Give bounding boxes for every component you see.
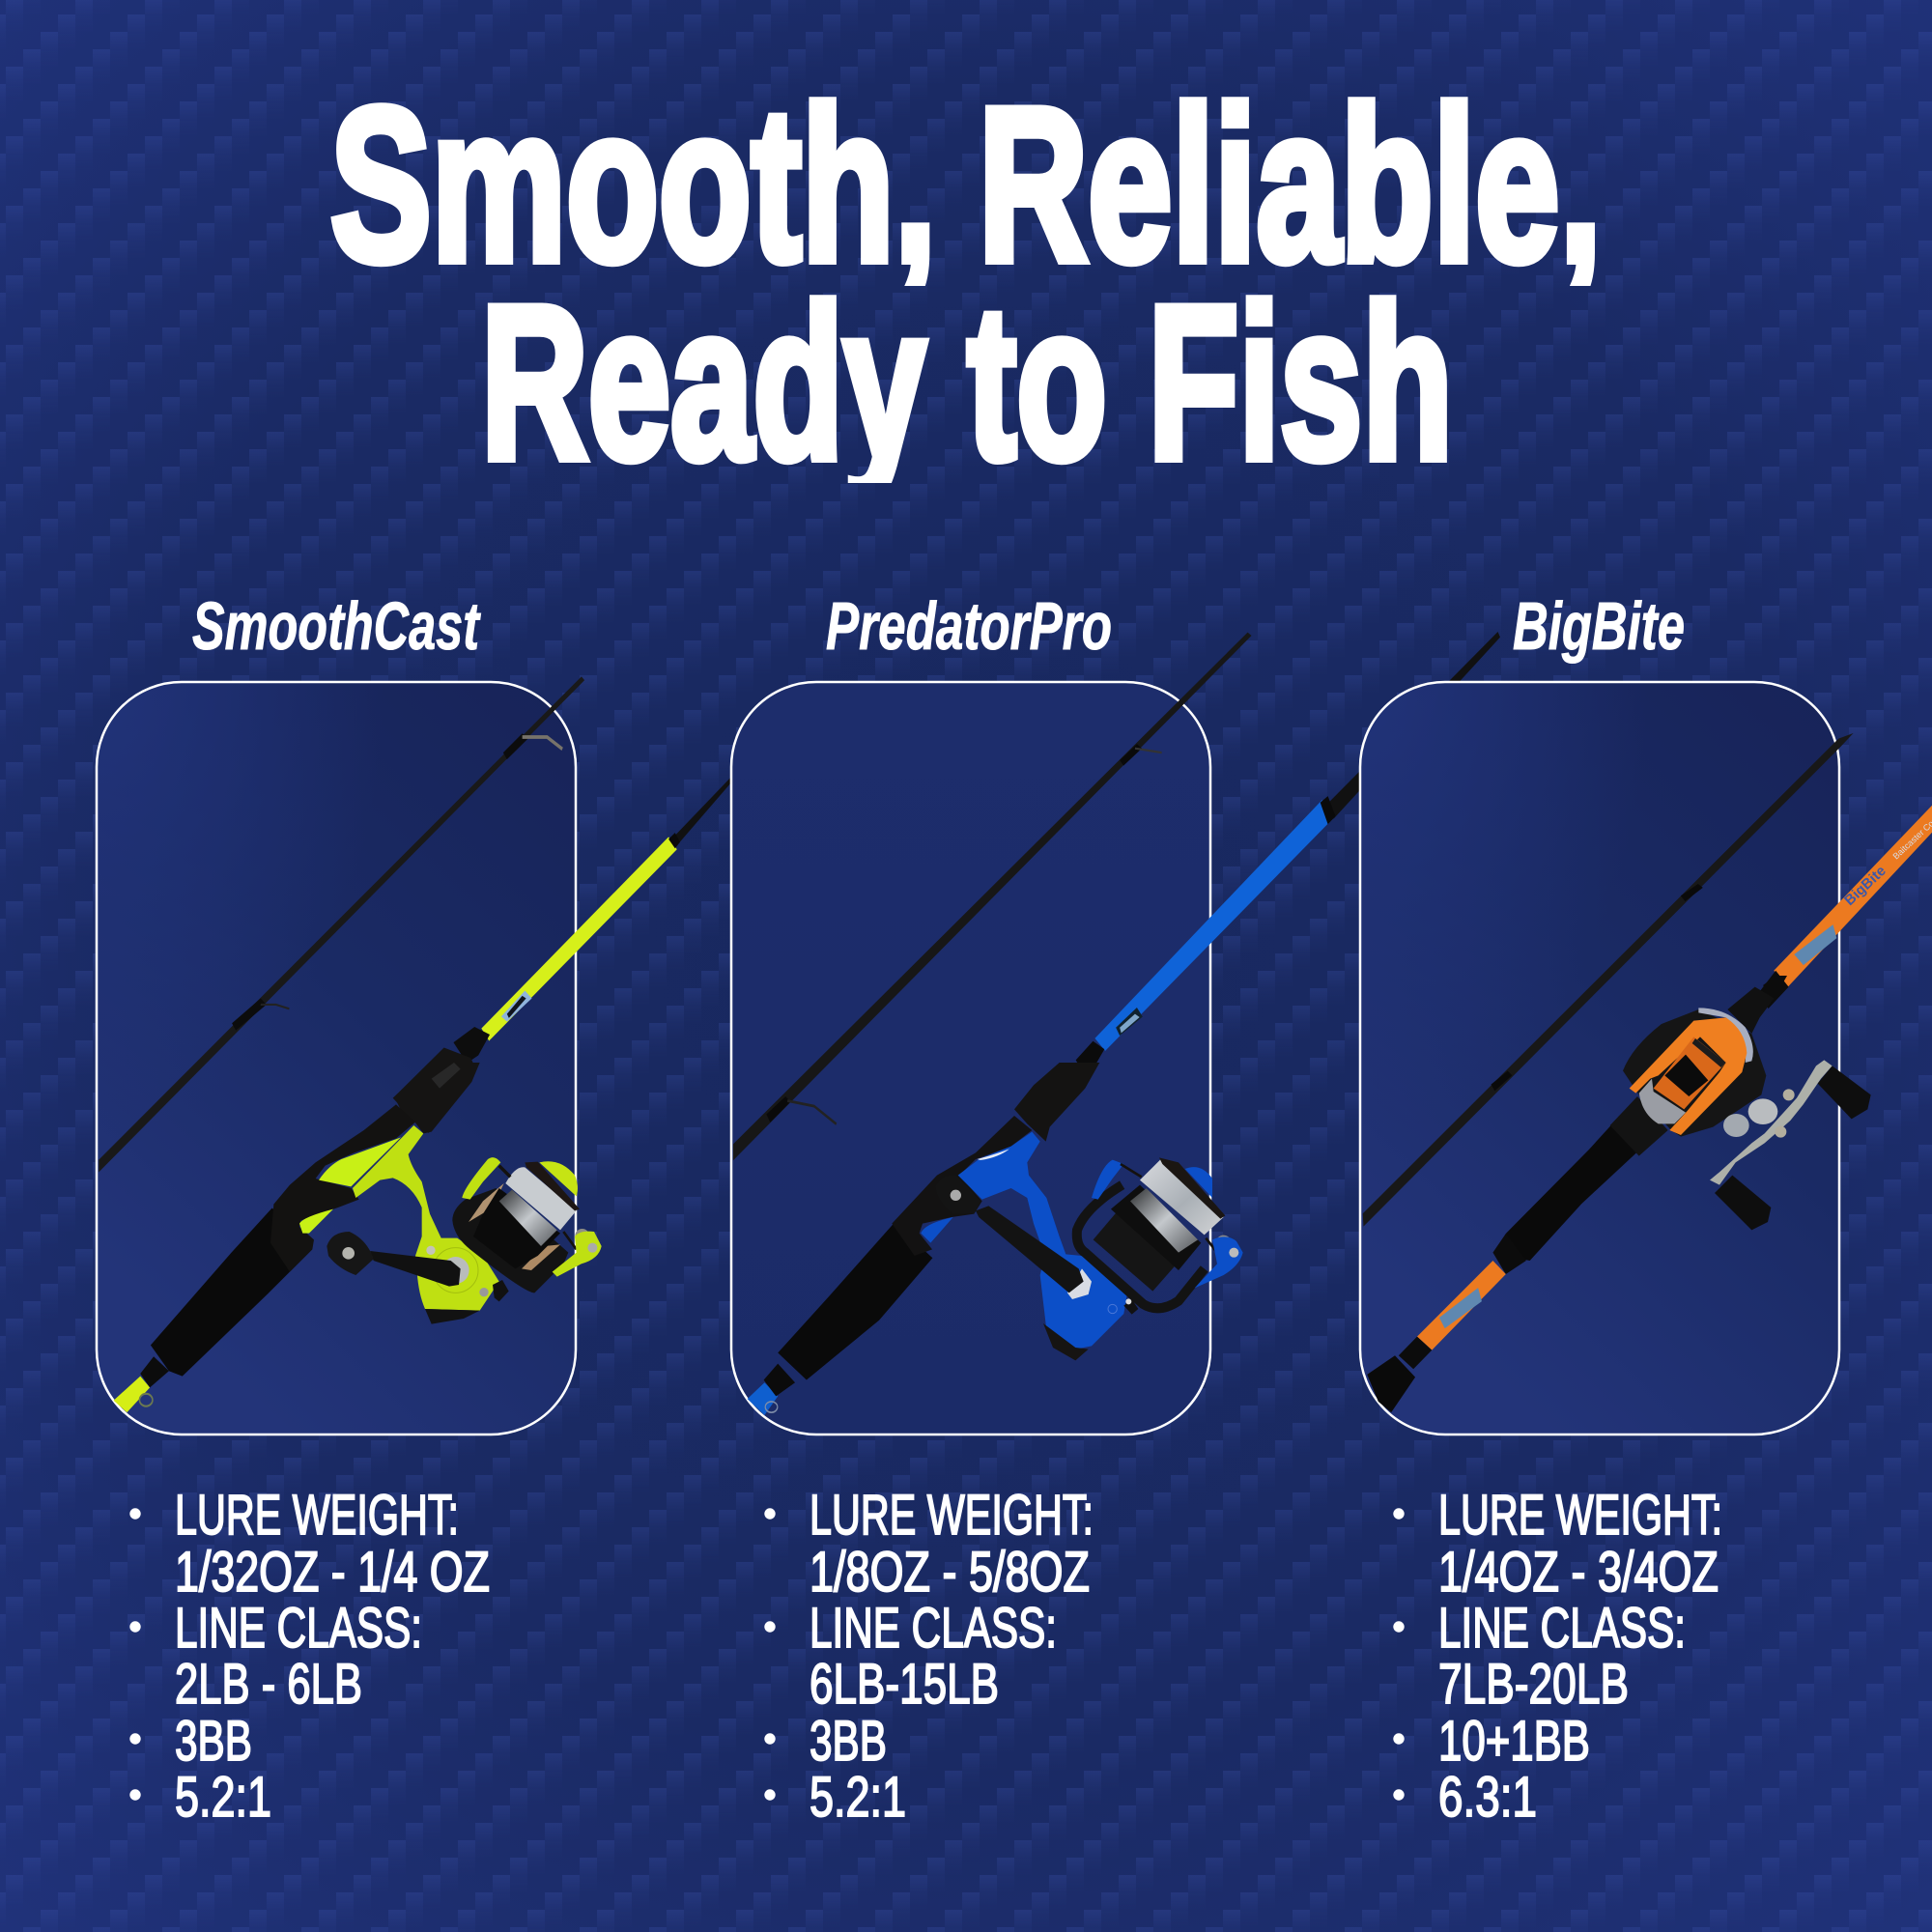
product name: PredatorPro: PredatorPro: [826, 588, 1112, 664]
spec list: SmoothCast: 3BB: [175, 1710, 252, 1773]
title: [330, 97, 1595, 483]
spec list: PredatorPro: LINE CLASS:: [810, 1597, 1057, 1660]
spec list: BigBite: 10+1BB: [1438, 1710, 1590, 1773]
product name: BigBite: BigBite: [1513, 588, 1685, 664]
spec list: SmoothCast: 2LB - 6LB: [175, 1653, 362, 1716]
title: Ready to Fish: [481, 260, 1453, 504]
spec list: BigBite: 7LB-20LB: [1438, 1653, 1629, 1716]
rod and baitcasting reel: orange: [1363, 733, 1932, 1412]
spec list: BigBite: LURE WEIGHT:: [1438, 1484, 1722, 1547]
spec list: PredatorPro: 5.2:1: [810, 1766, 906, 1829]
column: PredatorPro: [731, 588, 1500, 1435]
column: SmoothCast: [97, 588, 731, 1435]
spec list: BigBite: 6.3:1: [1438, 1766, 1537, 1829]
spec list: PredatorPro: [764, 1484, 1094, 1829]
spec list: SmoothCast: LURE WEIGHT:: [175, 1484, 459, 1547]
panel: SmoothCast: [97, 682, 576, 1435]
rod label: BigBite: BigBite: [1841, 863, 1889, 909]
spec list: PredatorPro: 1/8OZ - 5/8OZ: [810, 1541, 1090, 1604]
spec list: PredatorPro: 6LB-15LB: [810, 1653, 999, 1716]
spec list: BigBite: 1/4OZ - 3/4OZ: [1438, 1541, 1719, 1604]
spec list: SmoothCast: 1/32OZ - 1/4 OZ: [175, 1541, 490, 1604]
panel: BigBite: [1360, 682, 1839, 1435]
spec list: SmoothCast: LINE CLASS:: [175, 1597, 422, 1660]
spec list: BigBite: [1393, 1484, 1722, 1829]
spec list: SmoothCast: [129, 1484, 490, 1829]
product name: SmoothCast: SmoothCast: [192, 588, 481, 664]
column: BigBite: [1360, 588, 1932, 1435]
spec list: PredatorPro: 3BB: [810, 1710, 887, 1773]
spec list: SmoothCast: 5.2:1: [175, 1766, 271, 1829]
rod and spinning reel: yellow: [99, 676, 731, 1412]
rod and spinning reel: blue: [733, 632, 1500, 1415]
panel: PredatorPro: [731, 682, 1210, 1435]
spec list: PredatorPro: LURE WEIGHT:: [810, 1484, 1094, 1547]
spec list: BigBite: LINE CLASS:: [1438, 1597, 1686, 1660]
